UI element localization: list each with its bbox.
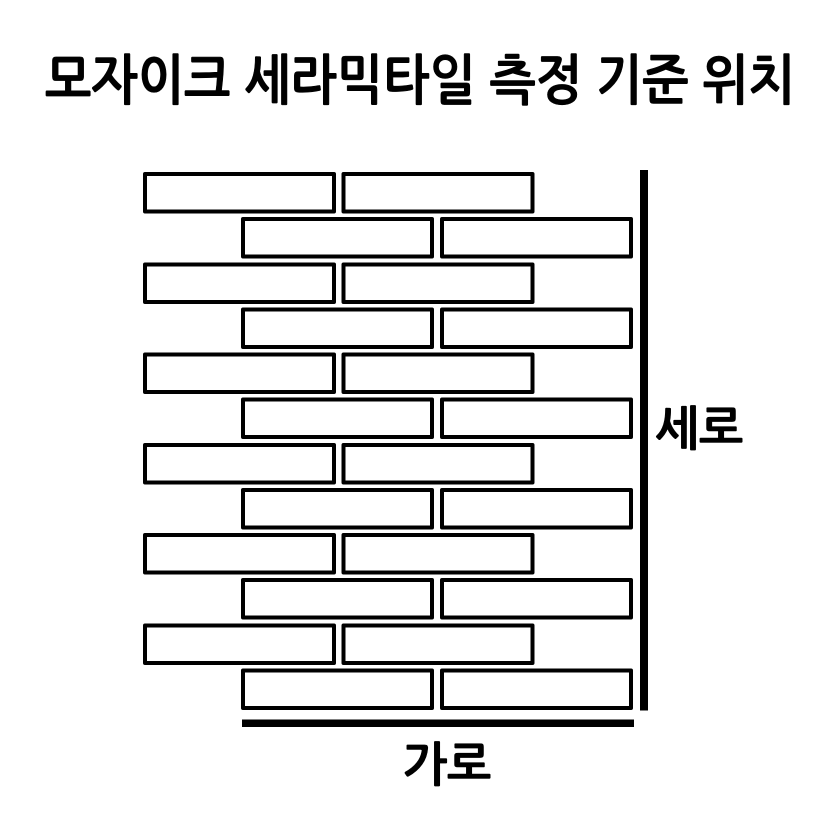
vertical measure line	[640, 170, 648, 710]
tile row 11	[145, 626, 532, 663]
tile row 10	[243, 580, 631, 618]
tile row 2	[243, 219, 631, 256]
tile row 8	[243, 490, 631, 528]
tile row 12	[243, 670, 631, 708]
tile row 1	[145, 174, 532, 212]
tile row 3	[145, 264, 532, 302]
tile row 6	[243, 400, 631, 437]
tile row 7	[145, 445, 532, 482]
horizontal measure line	[242, 720, 634, 727]
tile row 9	[145, 535, 532, 572]
label: horizontal: 가로	[403, 738, 491, 791]
tile row 4	[243, 310, 631, 347]
tile pattern	[145, 174, 631, 708]
label: vertical: 세로	[655, 402, 743, 455]
tile row 5	[145, 354, 532, 392]
